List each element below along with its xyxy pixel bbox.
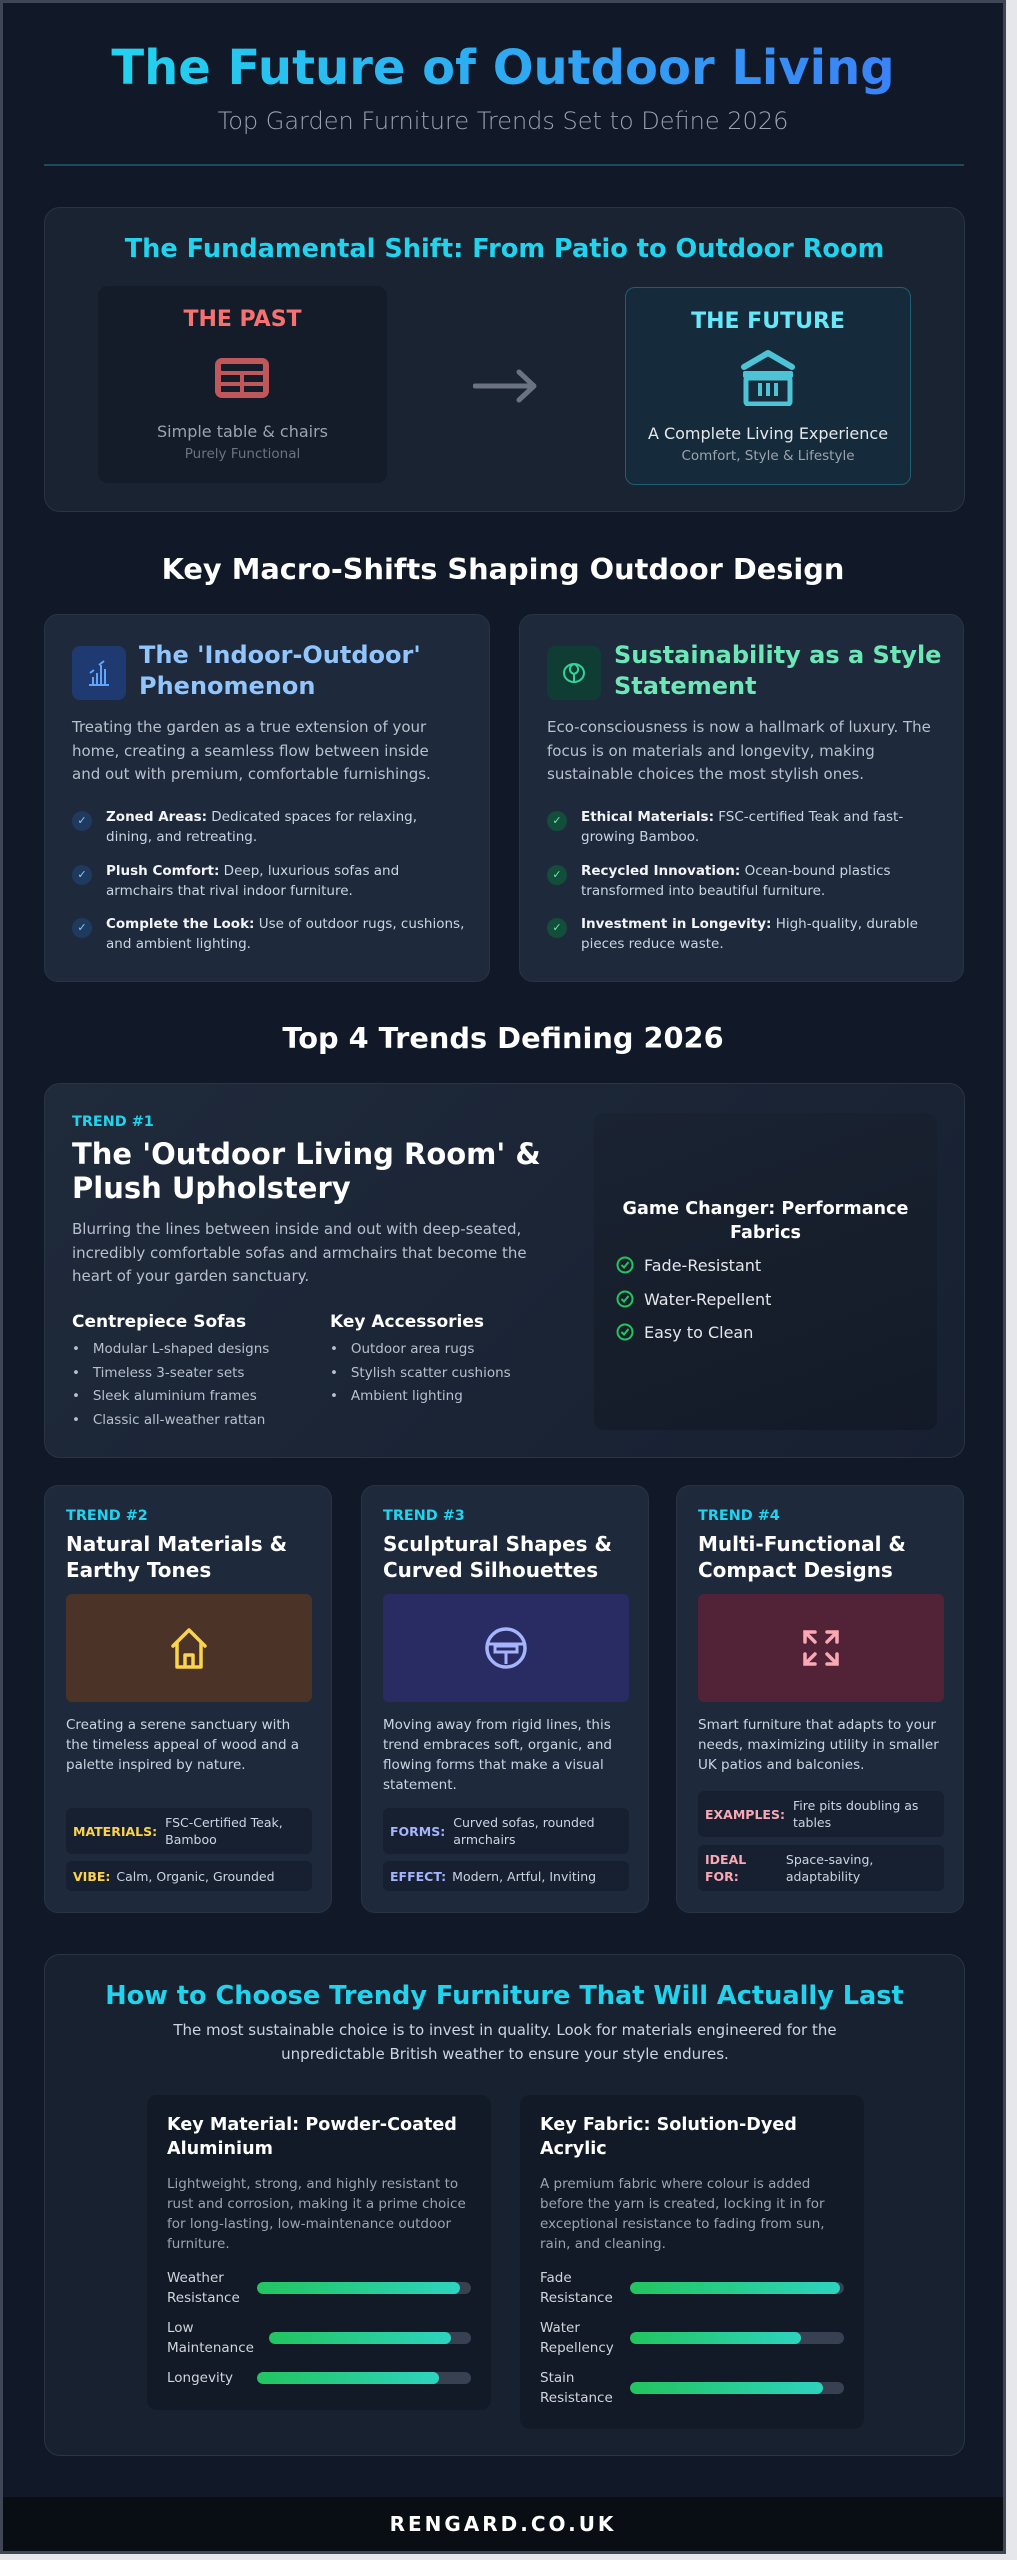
list: key accessories: • Stylish scatter cushions	[330, 1364, 511, 1380]
card: trend 3: TREND #3	[383, 1508, 465, 1524]
title: indoor-outdoor: The 'Indoor-Outdoor' Phenomenon	[139, 641, 421, 700]
list: Complete the Look: Use of outdoor rugs, cushions, and ambient lighting.	[106, 916, 464, 952]
card: trend 3	[361, 1485, 649, 1913]
list: key accessories: Key Accessories	[330, 1312, 484, 1332]
list: Ethical Materials: FSC-certified Teak and fast-growing Bamboo.	[581, 809, 903, 845]
box: the past: Simple table & chairs	[157, 422, 328, 441]
bar chart: aluminium: Longevity	[167, 2370, 233, 2386]
panel: trend 1: TREND #1	[72, 1114, 154, 1130]
card: trend 3: Curved sofas, rounded armchairs	[453, 1815, 595, 1847]
list	[547, 809, 918, 952]
card: trend 2: Creating a serene sanctuary with the timeless appeal of wood and a palette inspired by nature.	[66, 1717, 299, 1773]
card: trend 2: Calm, Organic, Grounded	[116, 1868, 275, 1884]
heading: fundamental shift: The Fundamental Shift: From Patio to Outdoor Room	[125, 234, 884, 264]
title: trend 1: The 'Outdoor Living Room' & Plush Upholstery	[72, 1137, 541, 1205]
footer: RENGARD.CO.UK	[390, 2512, 616, 2536]
list: centrepiece sofas: • Classic all-weather rattan	[72, 1412, 265, 1428]
box: acrylic: A premium fabric where colour is added before the yarn is created, locking it in for exceptional resistance to fading from sun, rain, and cleaning.	[540, 2176, 825, 2252]
list: centrepiece sofas: Centrepiece Sofas	[72, 1312, 246, 1332]
callout: performance fabrics	[594, 1113, 937, 1430]
card: trend 2: VIBE:	[73, 1868, 110, 1884]
card: indoor-outdoor	[44, 614, 490, 982]
card: trend 3: EFFECT:	[390, 1868, 446, 1884]
list: ✓	[77, 814, 87, 827]
bar chart: aluminium	[167, 2270, 471, 2386]
card: trend 4: Smart furniture that adapts to your needs, maximizing utility in smaller UK patios and balconies.	[698, 1717, 939, 1773]
icon: house	[66, 1594, 312, 1702]
heading: How to Choose Trendy Furniture That Will Actually Last	[105, 1981, 904, 2011]
box: aluminium: Lightweight, strong, and highly resistant to rust and corrosion, making it a prime choice for long-lasting, low-maintenance outdoor furniture.	[167, 2176, 466, 2252]
list: Plush Comfort: Deep, luxurious sofas and armchairs that rival indoor furniture.	[106, 862, 399, 898]
arrow	[473, 370, 536, 402]
icon: table	[215, 358, 269, 398]
icon: leaf	[547, 646, 601, 700]
list: ✓	[77, 921, 87, 934]
text: Treating the garden as a true extension of your home, creating a seamless flow between inside and out with premium, comfortable furnishings.	[72, 718, 431, 783]
box: aluminium	[147, 2095, 491, 2410]
panel: how to choose	[44, 1954, 965, 2456]
text: Eco-consciousness is now a hallmark of luxury. The focus is on materials and longevity, making sustainable choices the most stylish ones.	[547, 718, 931, 783]
list: centrepiece sofas: • Timeless 3-seater sets	[72, 1364, 244, 1380]
icon: expand arrows	[698, 1594, 944, 1702]
text: Blurring the lines between inside and out with deep-seated, incredibly comfortable sofas and armchairs that become the heart of your garden sanctuary.	[72, 1220, 527, 1285]
box: aluminium: Key Material: Powder-Coated Aluminium	[167, 2115, 457, 2159]
box: the past	[98, 286, 387, 483]
box: the future	[625, 287, 911, 485]
card: trend 4: TREND #4	[698, 1508, 780, 1524]
list: key accessories	[330, 1312, 511, 1404]
card: trend 4: EXAMPLES:	[705, 1806, 785, 1822]
list: centrepiece sofas	[72, 1312, 269, 1428]
card: trend 2: TREND #2	[66, 1508, 148, 1524]
card: trend 3: Sculptural Shapes & Curved Silhouettes	[383, 1532, 612, 1582]
list: ✓	[552, 921, 562, 934]
card: trend 3: FORMS:	[390, 1824, 445, 1838]
panel: fundamental shift	[44, 207, 965, 512]
card: trend 4	[676, 1485, 964, 1913]
icon: building	[741, 350, 795, 406]
bar chart: acrylic	[540, 2270, 844, 2406]
card: trend 3: Moving away from rigid lines, this trend embraces soft, organic, and flowing forms that make a visual statement.	[383, 1717, 612, 1793]
box: the future: Comfort, Style & Lifestyle	[682, 448, 854, 464]
bar chart: aluminium: Weather Resistance	[167, 2270, 240, 2306]
list: ✓	[552, 868, 562, 880]
box: the past: Purely Functional	[185, 446, 300, 462]
list: Zoned Areas: Dedicated spaces for relaxing, dining, and retreating.	[106, 809, 417, 845]
callout: performance fabrics: Easy to Clean	[644, 1323, 753, 1342]
card: trend 4: Space-saving, adaptability	[786, 1852, 873, 1884]
list	[72, 809, 464, 952]
card: trend 4: Fire pits doubling as tables	[793, 1798, 918, 1830]
card: trend 2: Natural Materials & Earthy Tones	[66, 1532, 287, 1582]
card: sustainability	[519, 614, 964, 982]
box: the future: A Complete Living Experience	[648, 424, 888, 443]
card: trend 2: MATERIALS:	[73, 1824, 157, 1838]
list: Investment in Longevity: High-quality, durable pieces reduce waste.	[581, 916, 918, 952]
card: trend 4: FOR:	[705, 1869, 739, 1884]
callout: performance fabrics: Water-Repellent	[644, 1290, 771, 1308]
bar chart: acrylic: Fade Resistance	[540, 2270, 613, 2306]
title: The Future of Outdoor Living	[111, 40, 895, 96]
list: centrepiece sofas: • Modular L-shaped designs	[72, 1341, 269, 1357]
card: trend 2: FSC-Certified Teak, Bamboo	[165, 1815, 283, 1847]
card: trend 3: Modern, Artful, Inviting	[452, 1868, 596, 1884]
panel: trend 1	[44, 1083, 965, 1458]
box: acrylic	[520, 2095, 864, 2429]
box: acrylic: Key Fabric: Solution-Dyed Acrylic	[540, 2115, 797, 2159]
bar chart: acrylic: Stain Resistance	[540, 2370, 613, 2406]
bar chart: aluminium: Low Maintenance	[167, 2320, 254, 2356]
subtitle: Top Garden Furniture Trends Set to Define 2026	[218, 107, 788, 135]
heading: macro shifts: Key Macro-Shifts Shaping Outdoor Design	[162, 552, 844, 586]
bar chart: acrylic: Water Repellency	[540, 2320, 614, 2356]
title: sustainability: Sustainability as a Style Statement	[614, 641, 941, 700]
box: the past: THE PAST	[183, 307, 302, 332]
footer	[3, 2497, 1003, 2551]
card: trend 4: Multi-Functional & Compact Designs	[698, 1532, 906, 1582]
card: trend 4: IDEAL	[705, 1852, 746, 1867]
icon: indoor-outdoor	[72, 646, 126, 700]
icon: curved table	[383, 1594, 629, 1702]
list: ✓	[552, 814, 562, 827]
box: the future: THE FUTURE	[691, 309, 845, 334]
list: key accessories: • Outdoor area rugs	[330, 1341, 474, 1357]
heading: top 4 trends: Top 4 Trends Defining 2026	[282, 1021, 724, 1055]
intro text: The most sustainable choice is to invest in quality. Look for materials engineered for the unpredictable British weather to ensure your style endures.	[173, 2021, 837, 2063]
callout: performance fabrics: Fade-Resistant	[644, 1256, 761, 1275]
callout: performance fabrics: Game Changer: Performance Fabrics	[623, 1199, 908, 1243]
list: ✓	[77, 868, 87, 880]
list: centrepiece sofas: • Sleek aluminium frames	[72, 1388, 257, 1404]
list: key accessories: • Ambient lighting	[330, 1388, 463, 1404]
list: Recycled Innovation: Ocean-bound plastics transformed into beautiful furniture.	[581, 862, 891, 898]
card: trend 2	[44, 1485, 332, 1913]
